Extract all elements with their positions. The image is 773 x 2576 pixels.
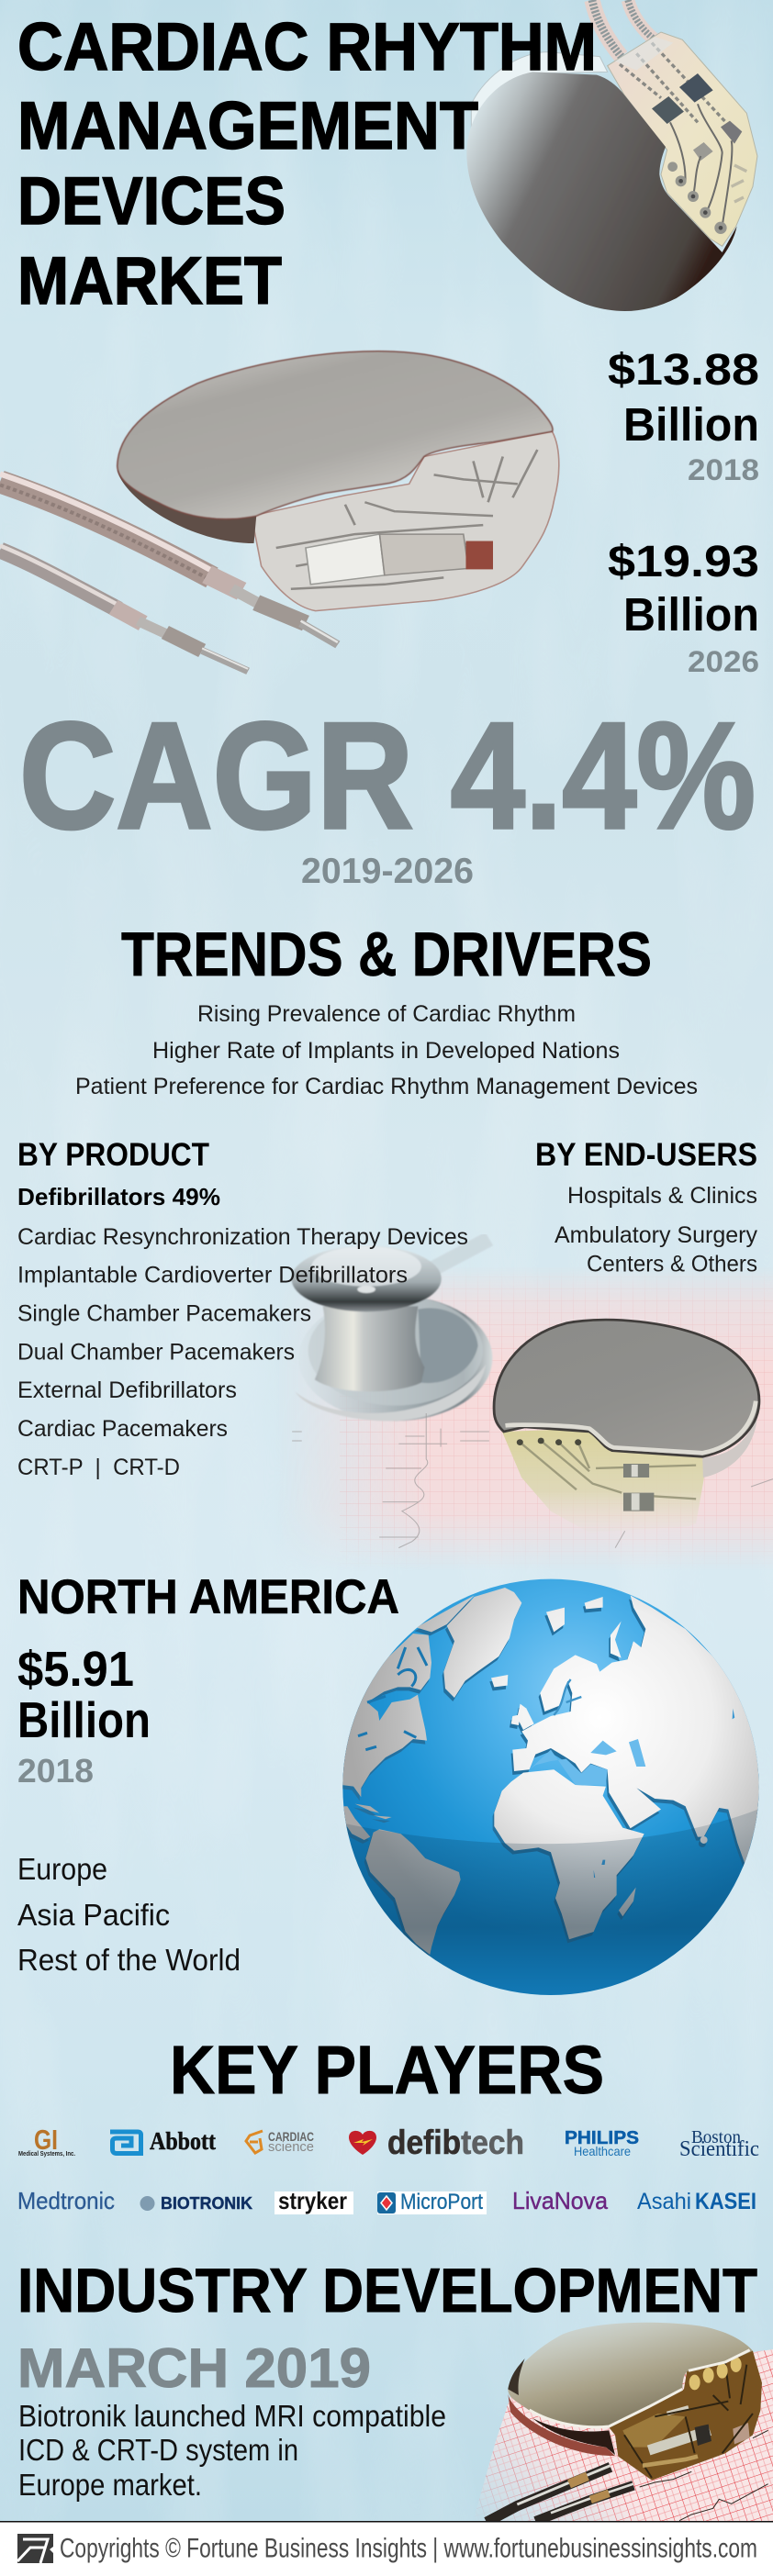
stat: 2026 market size: 2026	[688, 645, 759, 678]
panel: by end-users: Hospitals & Clinics	[567, 1183, 757, 1209]
panel: north america: 2018	[17, 1752, 94, 1790]
heading: key players: KEY PLAYERS	[170, 2032, 604, 2108]
logo: cardiac science: science	[268, 2139, 314, 2155]
logo: abbott	[110, 2127, 216, 2155]
logo: boston scientific	[679, 2127, 759, 2161]
panel: by product: External Defibrillators	[17, 1377, 237, 1403]
text block: trends list: Higher Rate of Implants in Developed Nations	[152, 1038, 620, 1064]
logo: livanova: LivaNova	[512, 2187, 609, 2214]
stat: 2018 market size	[608, 346, 759, 486]
logo: cardiac science	[246, 2129, 314, 2155]
logo: philips healthcare	[565, 2128, 639, 2158]
title: CARDIAC RHYTHM	[17, 10, 597, 84]
image: top right pacemaker	[466, 0, 757, 311]
stat: 2026 market size: $19.93	[608, 538, 759, 586]
logo: philips healthcare: PHILIPS	[565, 2128, 639, 2148]
heading: trends and drivers: TRENDS & DRIVERS	[121, 920, 652, 989]
logo: boston scientific: Boston	[691, 2127, 741, 2147]
logo: philips healthcare: Healthcare	[574, 2144, 631, 2158]
panel: north america: NORTH AMERICA	[17, 1570, 399, 1624]
text block: development detail: ICD & CRT-D system in	[18, 2433, 298, 2467]
panel: by product: Cardiac Resynchronization Therapy Devices	[17, 1224, 468, 1250]
text block: trends list: Rising Prevalence of Cardiac Rhythm	[197, 1001, 576, 1027]
logo: defibtech: defibtech	[387, 2124, 524, 2161]
text block: trends list: Patient Preference for Cardiac Rhythm Management Devices	[75, 1074, 698, 1099]
text block: development detail	[18, 2399, 446, 2502]
image: pacemaker on ECG strip	[473, 2323, 773, 2522]
panel: by end-users: Ambulatory Surgery	[555, 1222, 757, 1248]
stat: 2018 market size: 2018	[688, 453, 759, 486]
logo: medical systems: GI	[34, 2124, 58, 2156]
stat: 2026 market size	[608, 538, 759, 678]
icon: globe	[337, 1579, 765, 2002]
text block: development detail: Europe market.	[18, 2468, 202, 2502]
title	[17, 10, 597, 318]
panel: north america: $5.91	[17, 1642, 134, 1697]
panel: by end-users: Centers & Others	[587, 1252, 757, 1277]
title: MANAGEMENT	[17, 89, 478, 163]
text block: trends list	[75, 1001, 698, 1099]
logo: asahi kasei: KASEI	[695, 2189, 756, 2214]
panel: by product: Implantable Cardioverter Defibrillators	[17, 1263, 408, 1288]
image: stethoscope and pacemaker on ECG paper	[266, 1239, 773, 1571]
logo: cardiac science: CARDIAC	[268, 2129, 314, 2144]
logo: medtronic: Medtronic	[17, 2187, 115, 2214]
text block: other regions: Rest of the World	[17, 1943, 241, 1977]
panel: by product: Cardiac Pacemakers	[17, 1416, 228, 1442]
logo: boston scientific: Scientific	[679, 2137, 759, 2161]
logo: asahi kasei	[637, 2189, 756, 2214]
logo: medical systems: Medical Systems, Inc.	[18, 2149, 75, 2158]
logo: microport: MicroPort	[400, 2190, 483, 2214]
logos row 2	[17, 2187, 756, 2214]
logo: abbott: Abbott	[150, 2127, 216, 2155]
panel: by product: CRT-P | CRT-D	[17, 1455, 180, 1480]
footer	[0, 2521, 773, 2576]
panel: north america	[17, 1570, 399, 1790]
logo: biotronik: BIOTRONIK	[161, 2194, 252, 2213]
stat: 2018 market size: Billion	[623, 398, 759, 451]
image: silver pacemaker with leads	[0, 351, 559, 671]
icon: fortune business insights logo	[17, 2534, 53, 2563]
logo: asahi kasei: Asahi	[637, 2189, 691, 2214]
title: DEVICES	[17, 164, 286, 239]
stat: 2018 market size: $13.88	[608, 346, 759, 395]
panel: by end-users: BY END-USERS	[535, 1137, 757, 1173]
logo: stryker: stryker	[278, 2187, 347, 2214]
text block: other regions: Asia Pacific	[17, 1898, 170, 1932]
panel: by product: BY PRODUCT	[17, 1137, 209, 1173]
text block: other regions	[17, 1852, 241, 1977]
panel: north america: Billion	[17, 1691, 151, 1748]
text block: other regions: Europe	[17, 1852, 107, 1886]
CAGR period: 2019-2026	[301, 852, 474, 891]
panel: by product: Defibrillators 49%	[17, 1183, 220, 1210]
logos row 1	[18, 2124, 759, 2161]
text block: development detail: Biotronik launched MRI compatible	[18, 2399, 446, 2433]
panel: by product: Single Chamber Pacemakers	[17, 1301, 311, 1327]
logo: medical systems	[18, 2124, 75, 2158]
date: march 2019: MARCH 2019	[17, 2337, 371, 2399]
title: MARKET	[17, 244, 282, 318]
panel: by end-users	[535, 1137, 757, 1277]
panel: by product	[17, 1137, 468, 1480]
stat: 2026 market size: Billion	[623, 588, 759, 641]
panel: by product: Dual Chamber Pacemakers	[17, 1340, 295, 1366]
